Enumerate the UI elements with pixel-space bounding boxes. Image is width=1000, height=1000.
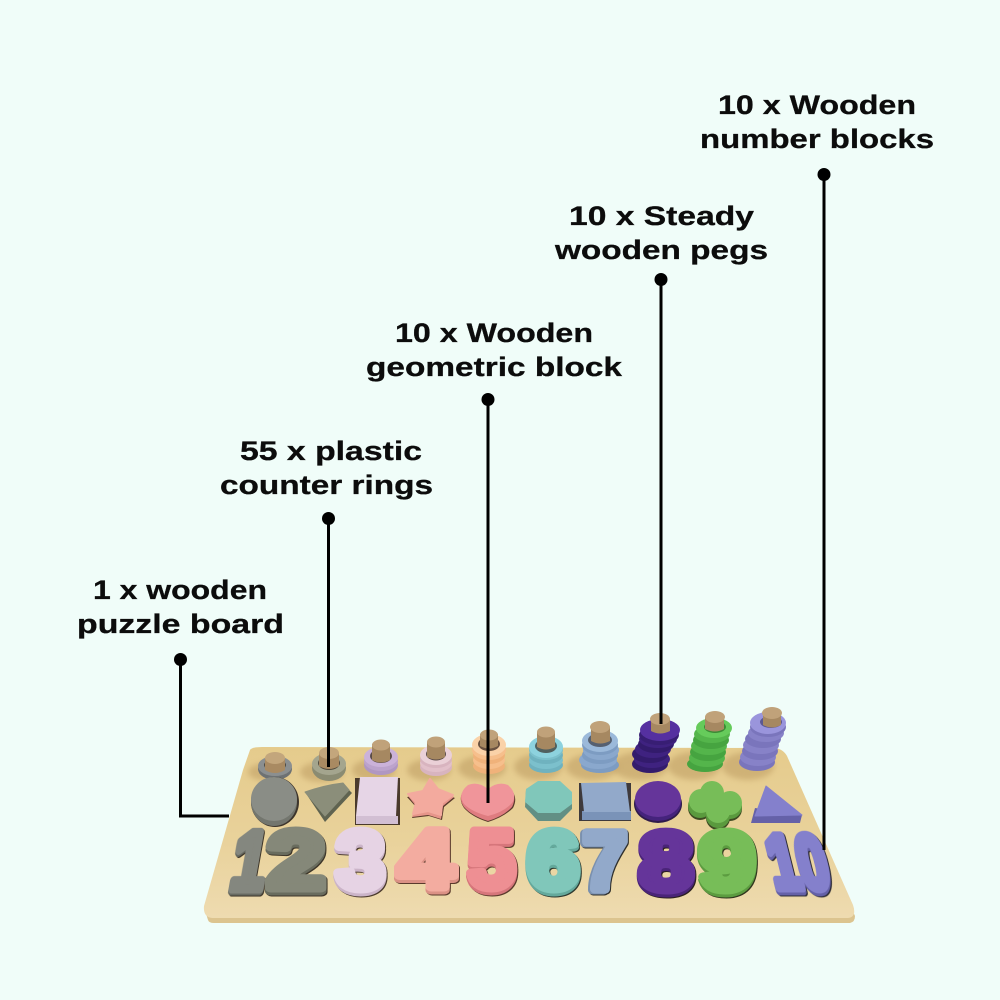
- label: 1 x wooden: [93, 575, 267, 605]
- callout: 55 x plastic counter rings: [220, 436, 433, 767]
- digit 3: 3: [336, 815, 385, 906]
- callout: 10 x wooden number blocks: [700, 90, 934, 850]
- label: 55 x plastic: [240, 436, 422, 466]
- digit 2: 2: [267, 815, 325, 906]
- digit 7: 7: [583, 816, 627, 907]
- row of geometric blocks: [251, 777, 802, 830]
- trapezoid block: [579, 782, 631, 821]
- dot: [654, 273, 668, 286]
- dot: [322, 512, 335, 525]
- oval block: [251, 777, 299, 827]
- label: 10 x Wooden: [718, 90, 916, 120]
- callout: 10 x wooden geometric block: [366, 318, 623, 803]
- peg 4: [420, 736, 452, 776]
- leader line: [327, 518, 330, 767]
- peg 8: [632, 713, 680, 773]
- digit 6: 6: [527, 815, 579, 906]
- rectangle block: [355, 777, 400, 825]
- purple oval block: [634, 781, 682, 823]
- dot: [174, 653, 187, 666]
- triangle block: [305, 783, 352, 822]
- purple triangle block: [751, 786, 802, 823]
- peg 9: [687, 711, 732, 772]
- label: 10 x Steady: [569, 201, 754, 231]
- heart block: [461, 784, 515, 822]
- leader line: [822, 174, 826, 850]
- label: counter rings: [220, 470, 433, 500]
- label: puzzle board: [77, 609, 284, 639]
- wooden puzzle board: [204, 747, 855, 923]
- clover block: [688, 781, 742, 830]
- star block: [407, 779, 455, 820]
- row of number blocks: [225, 814, 837, 907]
- callout: 10 x steady wooden pegs: [554, 201, 768, 724]
- digit 5: 5: [468, 814, 515, 905]
- peg 6: [529, 726, 563, 773]
- row of pegs with counter rings: [258, 707, 786, 781]
- callout: 1 x wooden puzzle board: [77, 575, 284, 816]
- digit 8: 8: [639, 816, 693, 907]
- leader line: [660, 279, 662, 724]
- label: wooden pegs: [554, 235, 768, 265]
- peg 5: [472, 730, 506, 774]
- label: geometric block: [366, 352, 623, 382]
- digit 9: 9: [699, 816, 755, 907]
- peg 2: [312, 747, 346, 781]
- peg 7: [579, 721, 619, 773]
- digit 1: 1: [225, 815, 275, 907]
- leader line: [486, 399, 490, 803]
- dot: [482, 393, 494, 406]
- peg 1: [258, 752, 292, 780]
- label: 10 x Wooden: [395, 318, 593, 348]
- leader line: [180, 659, 229, 816]
- octagon block: [525, 781, 572, 821]
- peg 10: [739, 707, 786, 771]
- peg 3: [364, 740, 398, 775]
- digit 4: 4: [398, 814, 454, 905]
- label: number blocks: [700, 124, 934, 154]
- dot: [818, 168, 830, 181]
- digits 10: 10: [758, 820, 837, 905]
